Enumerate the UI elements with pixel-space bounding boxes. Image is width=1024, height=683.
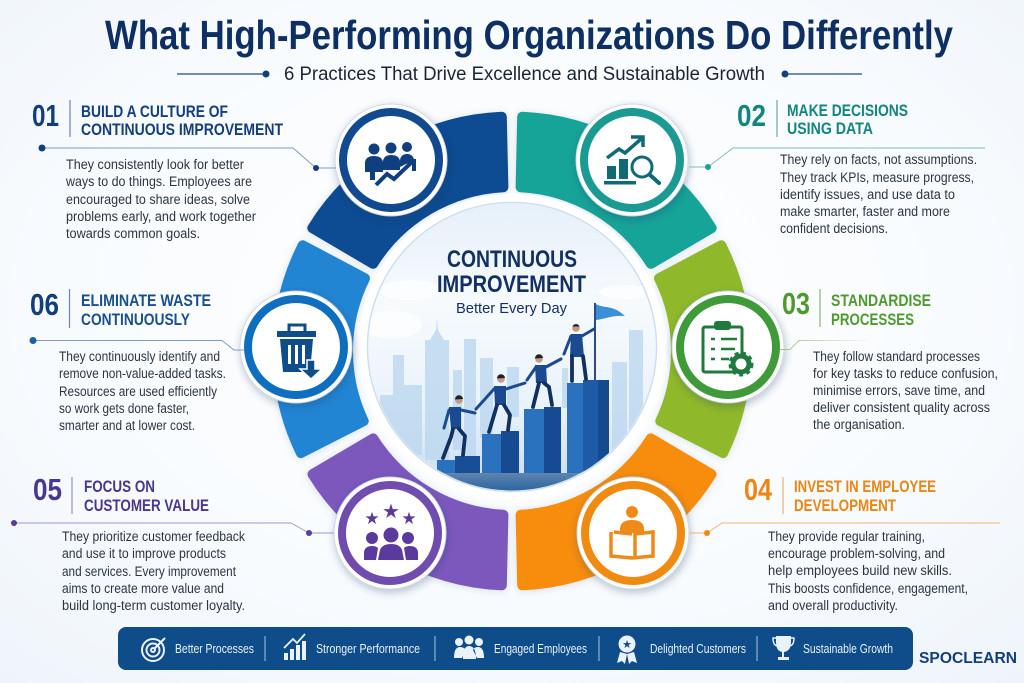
centre heading: CONTINUOUS bbox=[447, 246, 577, 273]
panel: 06 waste: ELIMINATE WASTE bbox=[81, 291, 211, 310]
panel: 04 development: help employees build new skills. bbox=[768, 563, 952, 578]
badge 5 customers: ★ bbox=[401, 509, 417, 528]
panel: 02 data: identify issues, and use data to bbox=[780, 187, 955, 202]
panel: 02 data: make smarter, faster and more bbox=[780, 204, 950, 219]
badge 6 waste bbox=[240, 291, 352, 403]
panel: 01 culture: encouraged to share ideas, solve bbox=[66, 192, 250, 207]
panel: 04 development bbox=[689, 472, 1000, 613]
panel: 01 culture: towards common goals. bbox=[66, 226, 200, 241]
bar 4 bbox=[567, 380, 609, 473]
panel: 01 culture: ways to do things. Employees are bbox=[65, 174, 252, 189]
flag bbox=[595, 303, 625, 380]
panel: 02 data: 02 bbox=[737, 98, 766, 133]
item: delighted customers bbox=[617, 636, 746, 664]
panel: 04 development: and overall productivity. bbox=[768, 598, 898, 613]
panel: 06 waste: 06 bbox=[30, 287, 59, 322]
segment 4 bbox=[521, 438, 712, 585]
ring of six segments bbox=[278, 117, 746, 585]
segment 5 bbox=[312, 438, 503, 585]
panel: 01 culture: BUILD A CULTURE OF bbox=[81, 102, 228, 121]
bar 3 bbox=[524, 407, 561, 473]
item: delighted customers: Delighted Customers bbox=[650, 642, 746, 656]
climbers bbox=[443, 324, 594, 458]
panel: 03 standardise: STANDARDISE bbox=[831, 291, 931, 310]
panel: 02 data: They rely on facts, not assumptions. bbox=[780, 152, 977, 167]
panel: 02 data: They track KPIs, measure progress, bbox=[780, 170, 974, 185]
badge 5 customers bbox=[334, 477, 446, 589]
panel: 06 waste: smarter and at lower cost. bbox=[59, 418, 195, 433]
item: better processes: Better Processes bbox=[175, 642, 254, 656]
panel: 05 customer value: aims to create more value and bbox=[62, 581, 224, 596]
panel: 02 data: USING DATA bbox=[787, 119, 873, 138]
panel: 04 development: encourage problem-solving, and bbox=[768, 546, 945, 561]
centre heading: Better Every Day bbox=[456, 300, 567, 317]
item: stronger performance: Stronger Performance bbox=[316, 642, 420, 656]
subtitle: 6 Practices That Drive Excellence and Sustainable Growth bbox=[284, 64, 765, 85]
panel: 06 waste: Resources are used efficiently bbox=[59, 384, 217, 399]
panel: 01 culture: They consistently look for better bbox=[66, 157, 244, 172]
badge 2 data bbox=[576, 104, 688, 216]
item: sustainable growth bbox=[773, 636, 893, 660]
bar 2 bbox=[482, 431, 519, 473]
panel: 03 standardise: the organisation. bbox=[813, 417, 905, 432]
item: stronger performance bbox=[284, 634, 420, 660]
panel: 04 development: They provide regular training, bbox=[768, 529, 925, 544]
panel: 05 customer value: and use it to improve products bbox=[62, 546, 226, 561]
badge 4 learning bbox=[577, 477, 689, 589]
item: engaged employees: Engaged Employees bbox=[494, 642, 587, 656]
badge 3 clipboard bbox=[672, 291, 784, 403]
item: sustainable growth: Sustainable Growth bbox=[803, 642, 893, 656]
centre illustration bbox=[359, 194, 665, 500]
segment 1 bbox=[312, 117, 503, 264]
panel: 04 development: 04 bbox=[744, 472, 773, 507]
panel: 05 customer value: They prioritize customer feedback bbox=[62, 529, 245, 544]
panel: 04 development: This boosts confidence, engagement, bbox=[768, 581, 968, 596]
bar 1 bbox=[437, 456, 480, 473]
panel: 01 culture bbox=[32, 98, 336, 241]
panel: 05 customer value: and services. Every improvement bbox=[62, 564, 236, 579]
footer bar bbox=[118, 627, 913, 670]
climber 4 bbox=[564, 324, 594, 381]
panel: 01 culture: CONTINUOUS IMPROVEMENT bbox=[81, 120, 284, 139]
panel: 06 waste: so work gets done faster, bbox=[59, 401, 189, 416]
centre heading: IMPROVEMENT bbox=[437, 271, 586, 298]
panel: 04 development: INVEST IN EMPLOYEE bbox=[794, 477, 936, 496]
panel: 04 development: DEVELOPMENT bbox=[794, 496, 896, 515]
panel: 03 standardise: They follow standard processes bbox=[813, 349, 980, 364]
panel: 06 waste: CONTINUOUSLY bbox=[81, 310, 191, 329]
climber 2 bbox=[476, 374, 525, 432]
panel: 05 customer value: build long-term customer loyalty. bbox=[62, 598, 245, 613]
panel: 02 data: confident decisions. bbox=[780, 221, 888, 236]
climber 3 bbox=[527, 354, 561, 407]
panel: 03 standardise: deliver consistent quality across bbox=[813, 400, 990, 415]
panel: 06 waste bbox=[30, 287, 244, 433]
item: better processes bbox=[142, 638, 254, 661]
segment 6 bbox=[278, 245, 365, 453]
panel: 05 customer value: CUSTOMER VALUE bbox=[84, 496, 209, 515]
panel: 02 data: MAKE DECISIONS bbox=[787, 101, 908, 120]
panel: 06 waste: They continuously identify and bbox=[59, 349, 220, 364]
panel: 01 culture: 01 bbox=[32, 98, 59, 133]
panel: 05 customer value: FOCUS ON bbox=[84, 477, 155, 496]
logo: SPOCLEARN bbox=[919, 650, 1017, 667]
panel: 03 standardise: 03 bbox=[782, 286, 810, 321]
segment 3 bbox=[659, 245, 746, 453]
panel: 05 customer value bbox=[11, 472, 334, 613]
panel: 03 standardise: minimise errors, save time, and bbox=[813, 383, 985, 398]
item: engaged employees bbox=[454, 636, 587, 659]
item: delighted customers: ★ bbox=[622, 639, 632, 651]
panel: 01 culture: problems early, and work together bbox=[66, 209, 256, 224]
climber 1 bbox=[443, 395, 475, 458]
panel: 03 standardise: for key tasks to reduce confusion, bbox=[813, 366, 998, 381]
panel: 03 standardise bbox=[780, 286, 998, 432]
panel: 05 customer value: 05 bbox=[33, 472, 62, 507]
badge 5 customers: ★ bbox=[364, 509, 380, 528]
centre heading bbox=[437, 246, 586, 317]
badge 5 customers: ★ bbox=[382, 501, 400, 523]
panel: 03 standardise: PROCESSES bbox=[831, 310, 914, 329]
segment 2 bbox=[521, 117, 712, 264]
panel: 06 waste: remove non-value-added tasks. bbox=[59, 366, 226, 381]
badge 1 team growth bbox=[335, 104, 447, 216]
panel: 02 data bbox=[689, 98, 985, 236]
